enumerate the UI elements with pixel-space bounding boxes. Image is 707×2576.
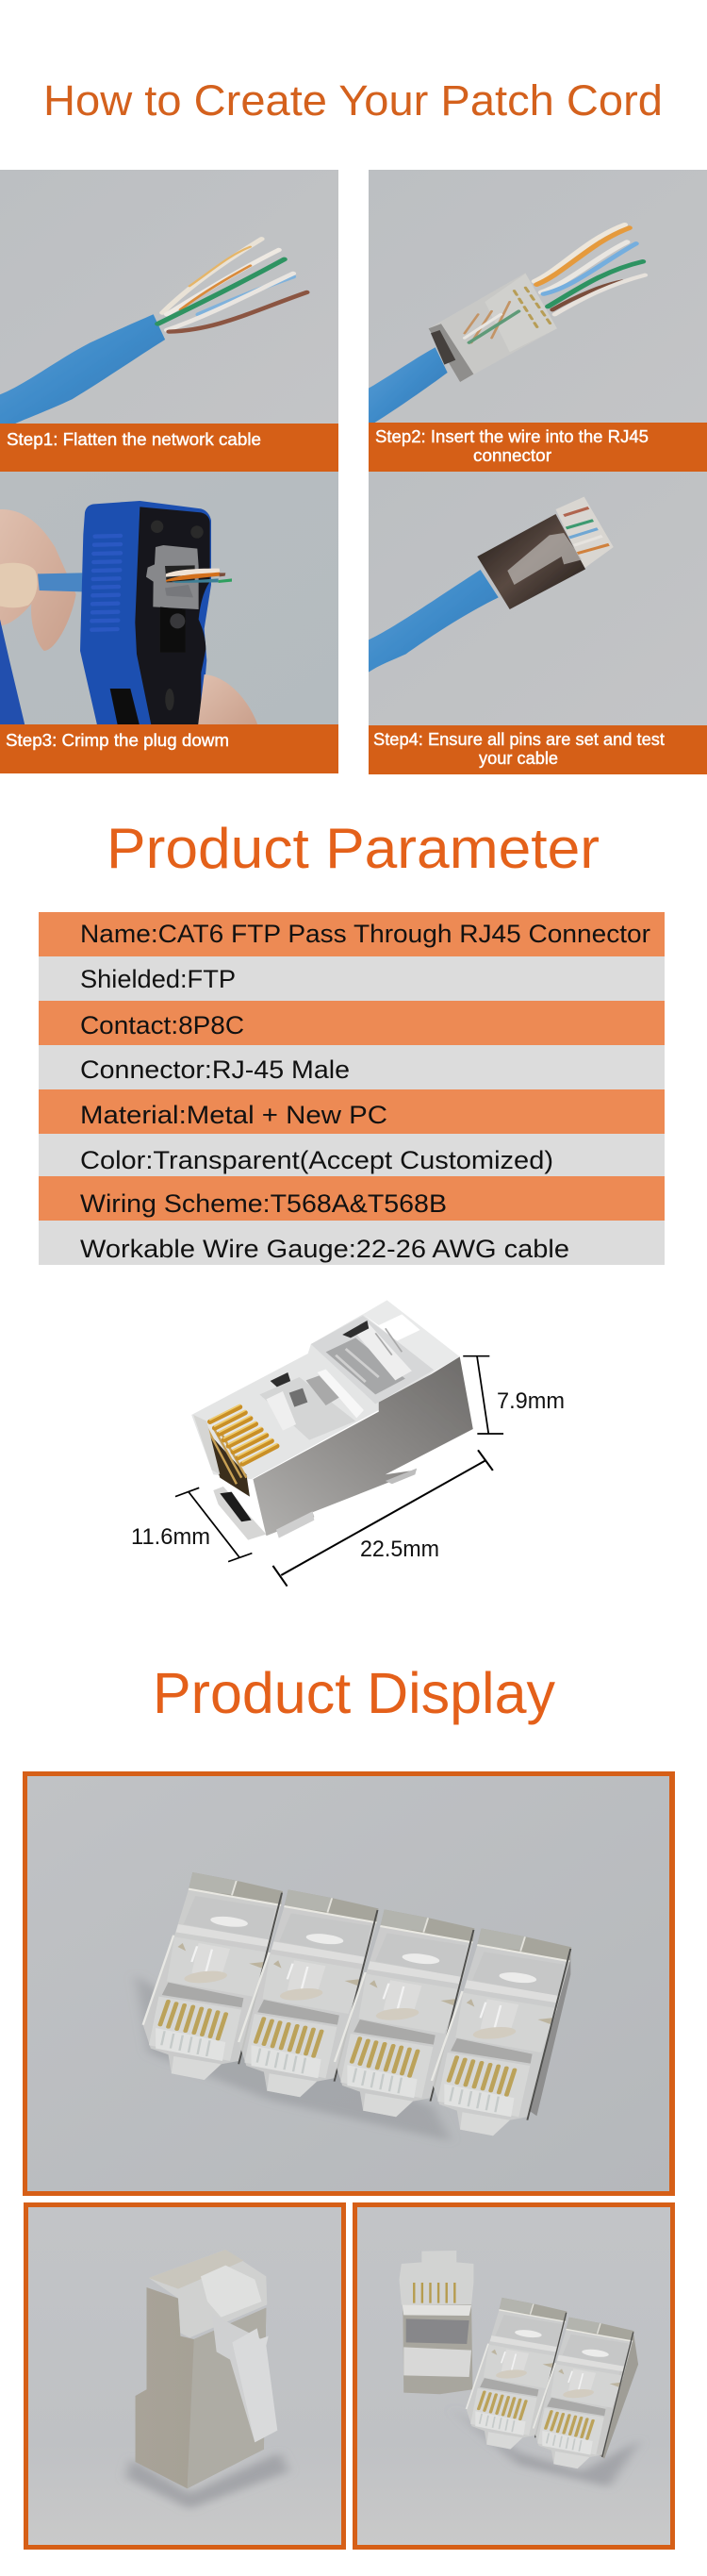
dimension: 22.5mm: 22.5mm [360,1537,439,1562]
row: name [39,912,665,956]
caption bar step 3 [0,724,338,773]
caption bar step 4: your cable [479,749,558,768]
photo: single connector standing [28,2207,341,2545]
dimension: 7.9mm [463,1356,565,1434]
heading: Product Display: Product Display [153,1661,555,1725]
row: contact: Contact:8P8C [80,1011,244,1039]
panel: step 1 flatten the cable [0,170,338,472]
panel: step 2 insert wire into connector [369,170,707,472]
caption bar step 2 [369,423,707,472]
photo: crimping tool held in hands [0,472,338,726]
row: connector: Connector:RJ-45 Male [80,1055,350,1084]
row: name: Name:CAT6 FTP Pass Through RJ45 Connector [80,920,650,948]
caption bar step 4: Step4: Ensure all pins are set and test [373,730,665,749]
panel: four connectors photo [23,1771,675,2196]
caption bar step 2: connector [473,446,551,465]
photo: stripped blue cable [0,170,338,424]
row: material: Material:Metal + New PC [80,1101,387,1129]
caption bar step 3: Step3: Crimp the plug dowm [6,731,229,750]
row: shielded: Shielded:FTP [80,965,236,993]
connector illustration [191,1300,473,1540]
row: shielded [39,956,665,1001]
photo: four connectors in a row [27,1776,669,2191]
caption bar step 1: Step1: Flatten the network cable [7,430,261,449]
panel: single connector photo [24,2202,346,2550]
photo: finished shielded plug on cable [369,472,707,725]
dimension: 11.6mm [131,1487,252,1562]
row: wire gauge: Workable Wire Gauge:22-26 AWG cable [80,1235,569,1263]
photo: cable inside RJ45 connector [369,170,707,423]
photo: three connectors group [357,2207,670,2545]
heading: Product Parameter: Product Parameter [107,817,600,880]
panel: three connectors photo [353,2202,675,2550]
row: wire gauge [39,1221,665,1265]
caption bar step 4 [369,725,707,774]
parameter table [39,912,665,1265]
panel: step 3 crimp the plug [0,472,338,773]
row: connector [39,1045,665,1089]
row: material [39,1089,665,1134]
title: How to Create Your Patch Cord: How to Create Your Patch Cord [43,76,663,125]
panel: step 4 test the cable [369,472,707,774]
dimension diagram [131,1300,565,1587]
caption bar step 2: Step2: Insert the wire into the RJ45 [375,427,649,446]
dimension: 11.6mm: 11.6mm [131,1524,210,1550]
row: color [39,1134,665,1176]
dimension: 22.5mm [272,1450,493,1587]
row: color: Color:Transparent(Accept Customized) [80,1146,553,1174]
row: contact [39,1001,665,1045]
row: wiring scheme [39,1176,665,1221]
caption bar step 1 [0,424,338,472]
dimension: 7.9mm: 7.9mm [497,1388,565,1414]
row: wiring scheme: Wiring Scheme:T568A&T568B [80,1189,447,1218]
